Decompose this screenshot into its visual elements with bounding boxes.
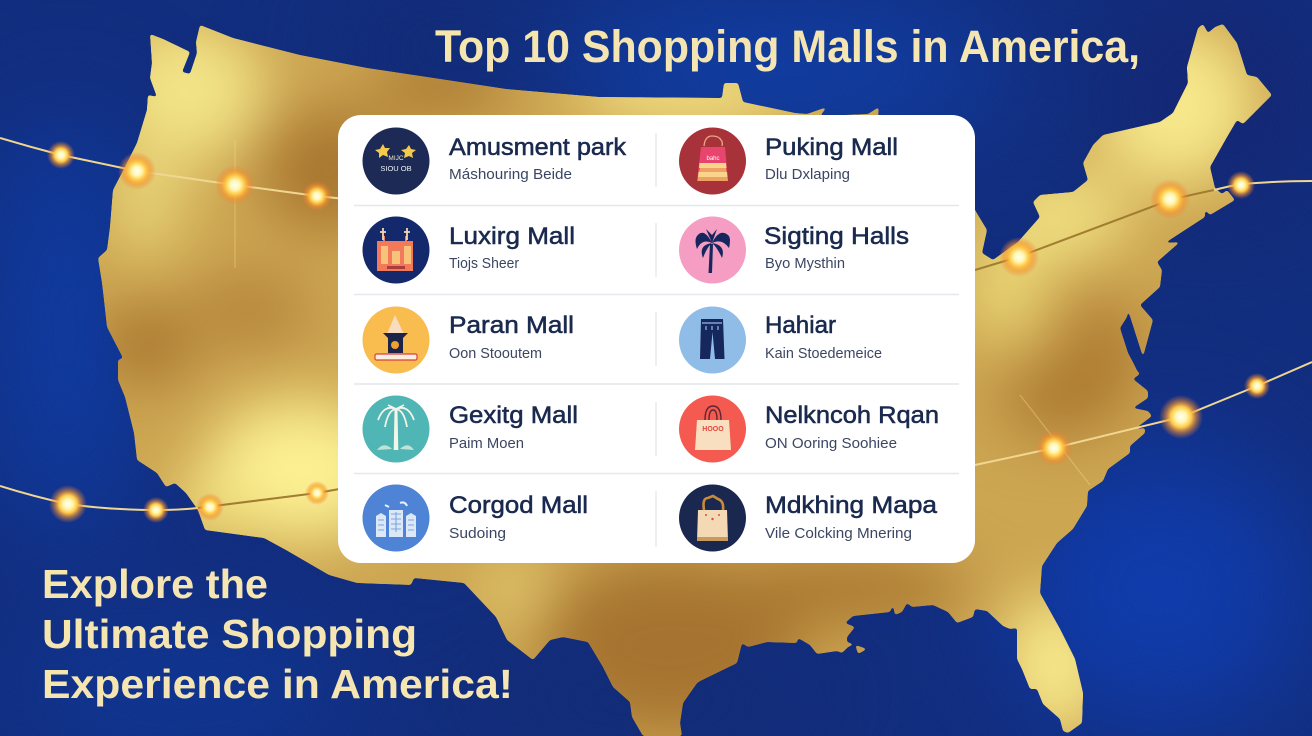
row: Sigting Halls [679, 216, 909, 284]
row: Luxirg Mall: Luxirg Mall [449, 223, 575, 250]
row: Mdkhing Mapa: Mdkhing Mapa [765, 492, 938, 519]
tagline: Explore the [42, 561, 268, 607]
row: Hahiar [679, 306, 882, 374]
row: Corgod Mall: Corgod Mall [449, 492, 588, 519]
row: Sigting Halls: Sigting Halls [764, 223, 909, 250]
panel: mall list [338, 115, 975, 563]
row: Corgod Mall [362, 484, 588, 552]
tagline: Experience in America! [42, 661, 513, 707]
row: Sigting Halls: Byo Mysthin [765, 256, 845, 272]
row: Gexitg Mall: Gexitg Mall [449, 402, 578, 429]
row: Nelkncoh Rqan: Nelkncoh Rqan [765, 402, 939, 429]
row: Gexitg Mall: Paim Moen [449, 436, 524, 452]
title: Top 10 Shopping Malls in America, [435, 21, 1140, 72]
row: Luxirg Mall: Tiojs Sheer [449, 256, 519, 272]
string of lights: lower right [975, 362, 1312, 485]
row: Paran Mall [362, 306, 574, 374]
icon: stars: SIOU OB [380, 164, 412, 173]
icon: castle [362, 216, 430, 284]
icon: gold-handled bag [679, 484, 746, 552]
row: Puking Mall [679, 128, 898, 194]
icon: white palm [362, 396, 430, 462]
row: Hahiar: Hahiar [765, 312, 836, 339]
row: Mdkhing Mapa: Vile Colcking Mnering [765, 526, 912, 542]
row: Puking Mall: Dlu Dxlaping [765, 167, 850, 183]
row: Luxirg Mall [362, 216, 575, 284]
row: Amusment park: Amusment park [449, 134, 627, 161]
row: Paran Mall: Paran Mall [449, 312, 574, 339]
icon: striped shopping bag: bahc [706, 156, 720, 162]
icon: navy palm [679, 216, 746, 284]
tagline [42, 561, 513, 707]
row: Nelkncoh Rqan: ON Ooring Soohiee [765, 436, 897, 452]
icon: striped shopping bag [679, 128, 746, 194]
row: Paran Mall: Oon Stooutem [449, 346, 542, 362]
string of lights: upper right [975, 171, 1312, 277]
icon: cream shopping bag: HOOO [702, 426, 724, 433]
row: Nelkncoh Rqan [679, 396, 939, 462]
icon: cream shopping bag [679, 396, 746, 462]
icon: city buildings [362, 484, 430, 552]
row: Amusment park [362, 128, 627, 194]
row: Amusment park: Máshouring Beide [449, 167, 572, 183]
tagline: Ultimate Shopping [42, 611, 417, 657]
icon: tent pavilion [362, 306, 430, 374]
icon: trousers [679, 306, 746, 374]
row: Gexitg Mall [362, 396, 578, 462]
row: Mdkhing Mapa [679, 484, 938, 552]
string of lights: lower left [0, 481, 345, 523]
icon: stars [362, 128, 430, 194]
icon: stars: MIJC [388, 155, 404, 162]
row: Corgod Mall: Sudoing [449, 526, 506, 542]
string of lights: upper left [0, 138, 345, 268]
row: Hahiar: Kain Stoedemeice [765, 346, 882, 362]
row: Puking Mall: Puking Mall [765, 134, 898, 161]
